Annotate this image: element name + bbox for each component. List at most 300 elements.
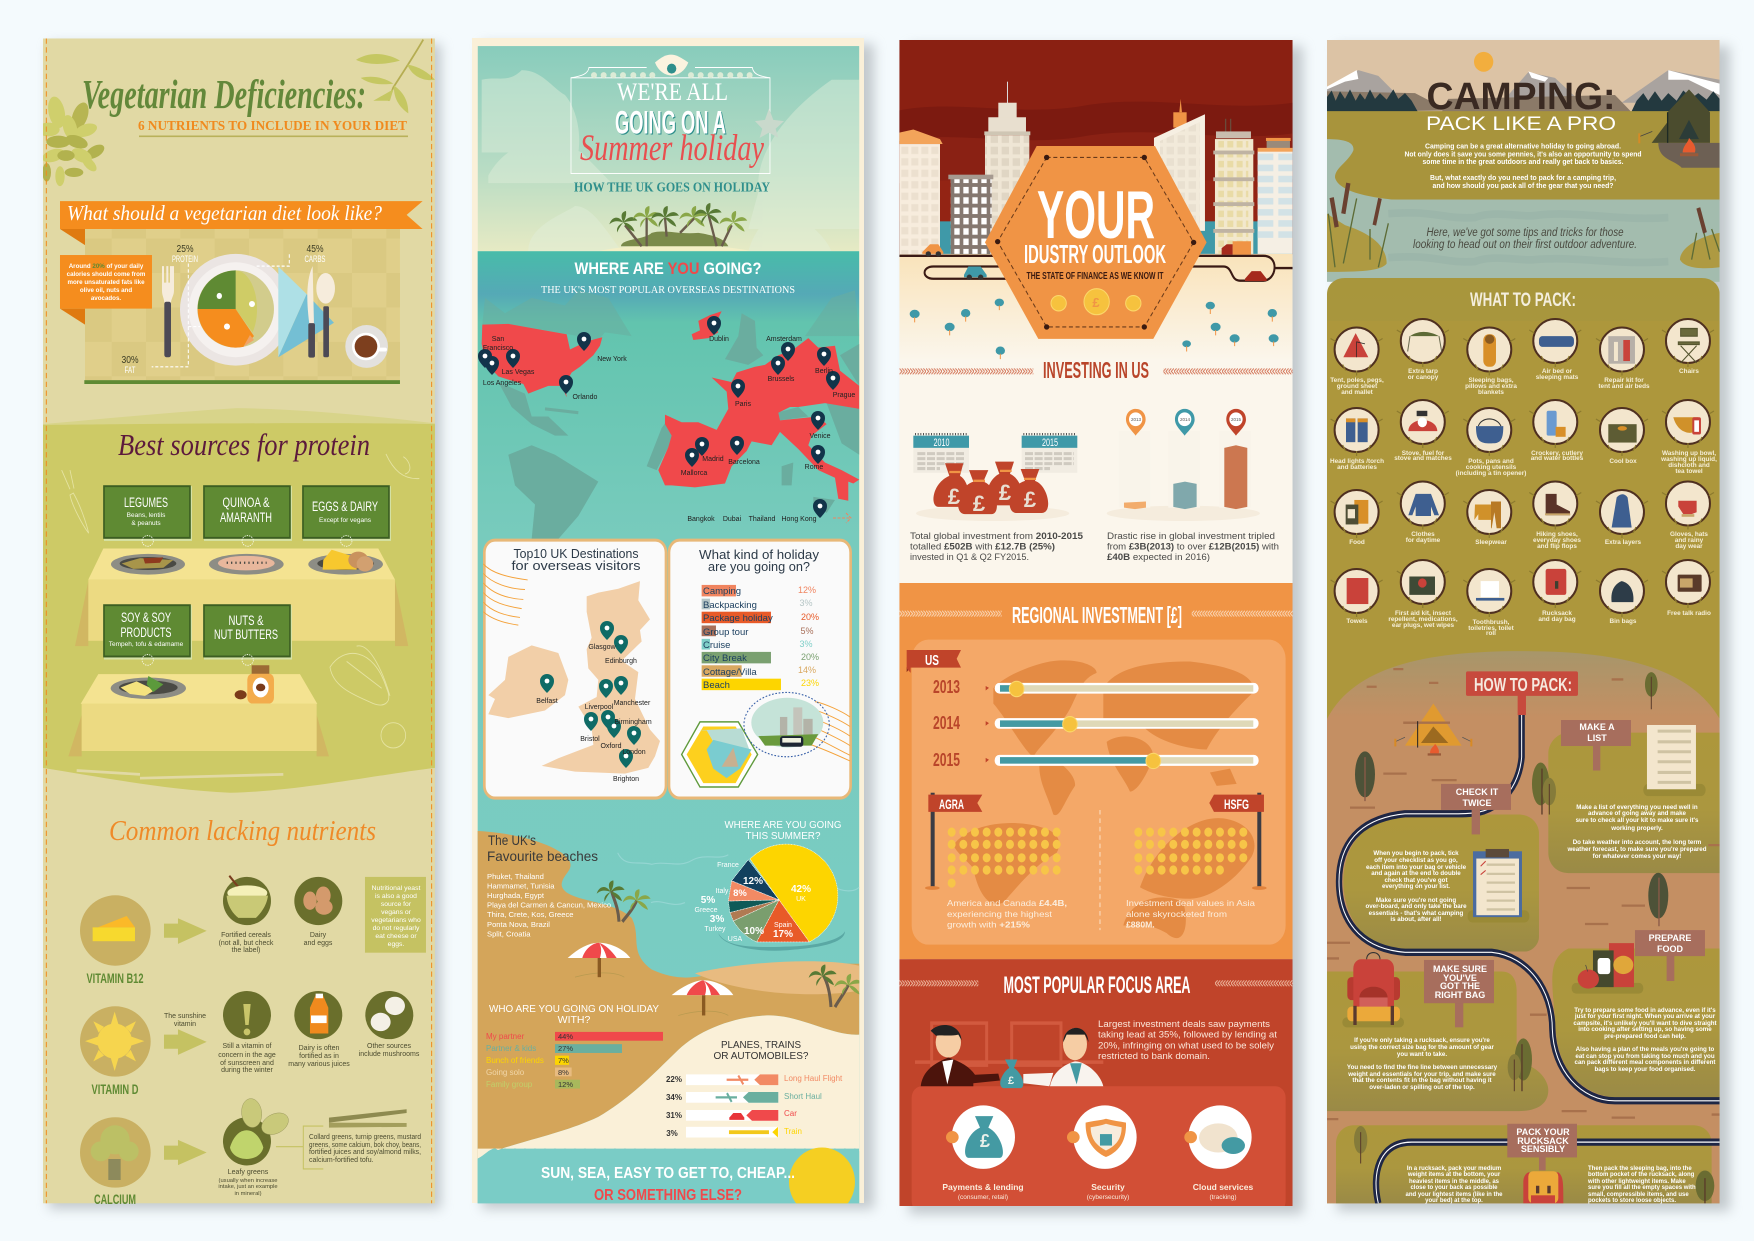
map city labels: Bangkok	[687, 516, 715, 523]
icon: star	[755, 108, 784, 138]
people	[921, 1025, 1103, 1088]
note text: is also a good	[375, 893, 417, 900]
transport title: OR AUTOMOBILES?	[714, 1050, 809, 1062]
focus labels: Payments & lending	[942, 1182, 1024, 1192]
frame	[571, 68, 770, 174]
nutrient text: fortified as in	[299, 1053, 339, 1060]
UK labels	[536, 644, 652, 783]
protein labels: NUT BUTTERS	[214, 627, 278, 642]
cards	[484, 540, 851, 798]
region text: experiencing the highest	[947, 909, 1053, 919]
icon: plate with pie	[152, 254, 291, 367]
section heading: THE UK'S MOST POPULAR OVERSEAS DESTINATIONS	[541, 285, 795, 296]
focus text	[1098, 1019, 1278, 1061]
icon: hexagon stamp	[682, 722, 758, 787]
map city labels: Thailand	[749, 516, 776, 523]
nutrients heading: Common lacking nutrients	[109, 815, 376, 847]
calcium text	[309, 1134, 421, 1164]
pie title: THIS SUMMER?	[746, 830, 821, 842]
money sign labels: £	[948, 484, 961, 509]
protein labels: & peanuts	[131, 520, 161, 527]
icon: broccoli	[91, 1125, 139, 1180]
item labels: and water bottles	[1531, 455, 1584, 462]
UK labels: Glasgow	[588, 644, 617, 651]
map city labels: Hong Kong	[781, 516, 817, 523]
investing text left: totalled £502B with £12.7B (25%)	[910, 542, 1055, 552]
who values: 27%	[558, 1044, 573, 1053]
icon: cheese	[93, 916, 135, 941]
icon: leafy greens	[230, 1097, 291, 1159]
transport values: 31%	[666, 1111, 682, 1120]
orange section	[899, 583, 1293, 959]
who values: 44%	[558, 1032, 573, 1041]
who bars	[555, 1032, 663, 1089]
focus icons	[946, 1105, 1252, 1169]
focus heading: MOST POPULAR FOCUS AREA	[1004, 972, 1190, 999]
item labels: Air bed or	[1542, 368, 1573, 375]
pie labels: Greece	[695, 907, 718, 914]
intro text: Not only does it save you some pennies, it's also an opportunity to spend	[1404, 150, 1642, 158]
holiday type labels: Package holiday	[703, 613, 773, 624]
green band	[43, 408, 435, 793]
item labels: stove and matches	[1394, 455, 1452, 462]
how-to text: rucksack right: sure you fill all the empty spaces with	[1588, 1185, 1696, 1191]
nutrient text: Other sources	[367, 1043, 411, 1050]
item labels: Sleeping bags,	[1468, 377, 1514, 384]
how-to text: list: sure to check all your kit to make sure it's	[1576, 817, 1699, 824]
callout text: more unsaturated fats like	[67, 279, 145, 286]
wooden signs	[1424, 720, 1705, 1170]
who labels: Partner & kids	[486, 1044, 536, 1053]
map city labels: Brussels	[768, 376, 795, 383]
how-to text: rucksack right: with other lightweight items. Make	[1587, 1179, 1686, 1185]
investing text left: Total global investment from 2010-2015	[910, 531, 1083, 541]
icons row three	[1346, 494, 1697, 528]
item labels: sleeping mats	[1536, 374, 1579, 381]
nutrient text: vitamin	[174, 1021, 196, 1028]
subtitle: 6 NUTRIENTS TO INCLUDE IN YOUR DIET	[138, 119, 408, 134]
pie labels: Italy	[716, 888, 729, 895]
footer text: OR SOMETHING ELSE?	[594, 1187, 742, 1204]
holiday type values: 12%	[798, 585, 816, 595]
ribbon	[60, 201, 423, 245]
region labels: 2015	[933, 750, 960, 770]
item labels: Rucksack	[1542, 610, 1572, 617]
how-to text: list: weather forecast, to make sure you're prepared	[1566, 846, 1707, 853]
UK pins	[540, 621, 641, 768]
focus text: restricted to bank domain.	[1098, 1051, 1210, 1061]
note text: vegans or	[381, 909, 412, 916]
regional heading: REGIONAL INVESTMENT [£]	[1012, 602, 1182, 628]
callout bracket	[276, 1126, 323, 1169]
calendar labels	[934, 437, 1058, 449]
hero heading: £	[1092, 295, 1100, 310]
item labels: Pots, pans and	[1468, 458, 1514, 465]
how-to text: bag: over-laden or spilling out of the top.	[1369, 1084, 1475, 1091]
how-to text: rucksack left: your bed) at the top.	[1425, 1198, 1483, 1204]
table one	[75, 549, 408, 646]
heading: GOING ON A	[616, 106, 727, 142]
how-to text: check: off your checklist as you go,	[1374, 857, 1458, 864]
region text: alone skyrocketed from	[1126, 909, 1227, 919]
item labels: and mallet	[1341, 389, 1374, 396]
holiday type values: 3%	[799, 598, 813, 608]
region labels: US	[925, 652, 939, 669]
how-to text: rucksack left: and your lightest items (like in the	[1405, 1192, 1503, 1198]
how-to text: food: eat can stop you from taking too much and you	[1575, 1053, 1715, 1060]
protein labels: Tempeh, tofu & edamame	[109, 641, 184, 648]
icon: list paper	[1643, 725, 1706, 796]
transport bars	[686, 1074, 778, 1138]
arrows	[164, 918, 207, 1165]
checker tablecloth	[84, 229, 400, 384]
transport labels: Short Haul	[784, 1092, 822, 1101]
main ground	[1327, 278, 1720, 1203]
tower	[984, 82, 1030, 231]
protein labels: NUTS &	[228, 613, 264, 628]
tree line	[1327, 89, 1720, 113]
fields	[1327, 733, 1720, 1203]
holiday type labels	[703, 586, 773, 691]
reed left	[1327, 183, 1388, 272]
how-to text: food: Try to prepare some food in advance, even if it's	[1574, 1007, 1716, 1014]
item labels: Cool box	[1609, 458, 1637, 465]
item labels: everyday shoes	[1533, 537, 1581, 544]
intro text: some time in the great outdoors and really get back to basics.	[1422, 157, 1624, 166]
focus text: taking lead at 35%, followed by lending at	[1098, 1030, 1278, 1040]
icon grid	[1331, 319, 1714, 617]
icon: mushrooms	[371, 997, 405, 1031]
map city labels: Madrid	[702, 456, 724, 463]
shadow ellipses	[916, 506, 1260, 521]
calcium text: fortified juices and soy/almond milks,	[309, 1149, 421, 1156]
sign labels: TWICE	[1462, 798, 1492, 808]
callout text: calories should come from	[67, 271, 146, 278]
how-to text: bag: that the contents fit in the bag without having it	[1352, 1077, 1492, 1084]
UK labels: London	[622, 749, 646, 756]
UK labels: Edinburgh	[605, 658, 637, 665]
transport values: 34%	[666, 1093, 682, 1102]
protein labels: SOY & SOY	[121, 610, 171, 625]
holiday type labels: Cruise	[703, 640, 730, 651]
how-to text: check: essentials - that's what camping	[1369, 910, 1464, 917]
icon: shell	[655, 55, 688, 75]
UK labels: Brighton	[613, 776, 639, 783]
holiday type values	[798, 585, 819, 688]
transport title: PLANES, TRAINS	[721, 1039, 801, 1051]
sign labels: LIST	[1587, 733, 1607, 743]
holiday type labels: Backpacking	[703, 600, 757, 611]
nutrient text: include mushrooms	[359, 1051, 420, 1058]
who labels: Family group	[486, 1080, 533, 1089]
pie labels: 8%	[733, 888, 747, 899]
protein heading: Best sources for protein	[118, 427, 370, 462]
item labels: day wear	[1675, 543, 1703, 550]
who title: WITH?	[558, 1014, 590, 1026]
sun	[1474, 52, 1493, 72]
icon: clipboard	[1468, 849, 1529, 922]
beaches list: Thira, Crete, Kos, Greece	[487, 910, 574, 919]
hexagon	[985, 146, 1207, 339]
how-to text: check: and again at the end to double	[1371, 870, 1461, 877]
item labels: roll	[1486, 630, 1496, 637]
focus labels: (tracking)	[1209, 1194, 1237, 1201]
money sign labels	[948, 480, 1037, 516]
pie title	[724, 819, 842, 842]
sky	[899, 40, 1293, 254]
bars 3D	[1119, 431, 1251, 509]
icon: knife and spoon	[307, 266, 335, 358]
icon: postmark	[744, 692, 829, 757]
chevrons red	[899, 980, 1293, 986]
clouds	[482, 70, 859, 251]
nutrient text: The sunshine	[164, 1013, 206, 1020]
icon: sun	[85, 1012, 144, 1071]
note text: Nutritional yeast	[372, 885, 420, 892]
protein labels: Beans, lentils	[127, 512, 166, 519]
callout text: olive oil, nuts and	[80, 287, 132, 294]
heading: Summer holiday	[580, 128, 764, 169]
focus text: 20%, infringing on what used to be solely	[1098, 1040, 1275, 1050]
item labels: toiletries, toilet	[1468, 625, 1515, 632]
pie ripple	[718, 931, 845, 951]
money sign labels: £	[999, 480, 1012, 505]
world map	[953, 660, 1254, 938]
sign labels: SENSIBLY	[1521, 1144, 1565, 1154]
map city labels: Las Vegas	[502, 369, 535, 376]
transport labels: Train	[784, 1127, 802, 1136]
who values	[558, 1032, 573, 1089]
how-to text: check: check that you've got	[1384, 877, 1448, 884]
item labels: Tent, poles, pegs,	[1330, 377, 1384, 384]
beaches heading: The UK's	[488, 832, 536, 848]
red Ireland	[692, 311, 722, 340]
money sign labels: £	[1024, 487, 1037, 512]
item labels: Washing up bowl,	[1662, 450, 1716, 457]
holiday type labels: Group tour	[703, 627, 748, 638]
nutrient text: in mineral)	[234, 1191, 262, 1197]
lake text: looking to head out on their first outdoor adventure.	[1413, 239, 1637, 251]
item labels: Food	[1349, 539, 1365, 546]
cream shore	[477, 1015, 859, 1159]
item labels: Bin bags	[1610, 618, 1637, 625]
transport values	[666, 1075, 682, 1138]
subtitle: PACK LIKE A PRO	[1426, 114, 1616, 135]
map city labels: New York	[597, 356, 627, 363]
item labels: and batteries	[1337, 464, 1377, 471]
transport values: 22%	[666, 1075, 682, 1084]
plate labels: 45%	[306, 244, 324, 255]
region text: America and Canada £4.4B,	[947, 898, 1067, 908]
note text: eat cheese or	[375, 933, 417, 940]
icon: palm trees	[597, 880, 862, 1007]
reed right	[1680, 208, 1720, 268]
pins	[1126, 409, 1246, 436]
calcium text: greens, some calcium, bok choy, beans,	[309, 1142, 421, 1149]
transport title	[714, 1039, 809, 1062]
icon: leaves left	[43, 96, 104, 186]
plate labels: FAT	[124, 365, 136, 375]
callout fold	[60, 255, 152, 325]
card titles: Top10 UK Destinations	[514, 546, 639, 561]
pin labels: 2015	[1231, 417, 1242, 422]
doodles	[62, 454, 419, 748]
how-to text: list: working properly.	[1610, 825, 1663, 832]
sky	[1327, 40, 1720, 116]
beaches list: Hammamet, Tunisia	[487, 882, 555, 890]
icon: coffee cup	[345, 325, 388, 368]
how-to text: rucksack right: small, compressible items, and use	[1588, 1192, 1689, 1198]
how-to text: rucksack left: weight items at the bottom, your	[1407, 1172, 1501, 1178]
pie chart	[728, 844, 838, 942]
how-to text: food	[1573, 1007, 1717, 1073]
pie labels: 17%	[773, 929, 793, 940]
UK labels: Oxford	[600, 743, 622, 750]
arrow: more destinations	[833, 513, 851, 523]
item labels: tent and air beds	[1598, 383, 1650, 390]
footer wave	[477, 1148, 859, 1203]
money bags	[933, 462, 1048, 514]
icon: tent	[1638, 89, 1710, 145]
item labels: ear plugs, wet wipes	[1392, 622, 1455, 629]
nutrient text: and eggs	[304, 940, 333, 947]
beaches list: Hurghada, Egypt	[487, 891, 545, 900]
how-to text: bag: You need to find the fine line between unnecessary	[1347, 1064, 1498, 1071]
hero heading	[1024, 177, 1166, 310]
who values: 7%	[558, 1056, 569, 1065]
chevrons regional	[899, 611, 1293, 617]
red section	[899, 959, 1293, 1208]
item labels: (including a tin opener)	[1456, 470, 1526, 477]
how-to text: rucksack right: pockets to store loose objects.	[1588, 1198, 1676, 1204]
callout text: avocados.	[91, 295, 121, 302]
map of UK	[488, 581, 660, 774]
region labels	[925, 652, 1249, 812]
icon labels: pound signs: £	[980, 1131, 990, 1151]
sign labels: RIGHT BAG	[1435, 990, 1485, 1000]
plate labels: PROTEIN	[172, 254, 198, 264]
map city labels: Berlin	[815, 368, 833, 375]
beaches heading	[487, 832, 598, 864]
sign labels	[1433, 722, 1691, 1154]
coin grids	[952, 832, 1247, 883]
heading: GOING ON A	[615, 104, 726, 140]
beaches list: Phuket, Thailand	[487, 872, 544, 881]
trees	[1354, 672, 1714, 1203]
transport labels	[784, 1074, 843, 1136]
item labels: washing up liquid,	[1660, 456, 1717, 463]
card titles	[512, 546, 819, 574]
pie title: WHERE ARE YOU GOING	[724, 819, 842, 831]
pin labels: 2013	[1131, 417, 1142, 422]
gray building	[948, 175, 993, 254]
investing text left: invested in Q1 & Q2 FY2015.	[910, 552, 1029, 562]
sign labels: MAKE SURE	[1433, 964, 1487, 974]
how-to text: check: everything on your list.	[1382, 883, 1450, 890]
icon: campfire	[1658, 138, 1720, 168]
heading: HOW THE UK GOES ON HOLIDAY	[574, 180, 770, 196]
how-to text: food: pre-prepared food can help.	[1604, 1033, 1686, 1040]
focus labels	[942, 1182, 1254, 1201]
who title: WHO ARE YOU GOING ON HOLIDAY	[489, 1003, 659, 1015]
how-to text: bag	[1347, 1037, 1498, 1091]
nutrient text: Still a vitamin of	[222, 1043, 272, 1050]
sign labels: GOT THE	[1440, 981, 1480, 991]
how-to text: bag: If you're only taking a rucksack, ensure you're	[1354, 1037, 1490, 1044]
how-to text: check: each item into your bag or vehicle	[1366, 864, 1467, 871]
inner red panel	[912, 1086, 1286, 1213]
road main	[1339, 715, 1720, 1101]
plate labels	[122, 244, 326, 375]
plate labels: 25%	[176, 244, 194, 255]
building	[899, 130, 943, 254]
windows tower	[1213, 119, 1254, 254]
how to pack heading: HOW TO PACK:	[1474, 675, 1572, 695]
nutrient text	[164, 932, 420, 1197]
focus labels: (cybersecurity)	[1087, 1194, 1129, 1201]
coins	[1051, 289, 1141, 315]
card titles: are you going on?	[708, 559, 810, 574]
red Europe	[658, 338, 859, 501]
how-to text: rucksack left	[1405, 1166, 1503, 1204]
item labels: Hiking shoes,	[1536, 531, 1578, 538]
icon: napkin	[278, 267, 334, 357]
item labels	[1330, 368, 1717, 637]
holiday type values: 23%	[801, 678, 819, 688]
nutrient text: Fortified cereals	[221, 932, 271, 939]
note box	[365, 877, 426, 953]
vitamin labels	[86, 970, 144, 1207]
icons row one	[1343, 329, 1699, 367]
UK labels: Belfast	[536, 698, 558, 705]
how-to text: rucksack right: Then pack the sleeping bag, into the	[1588, 1166, 1692, 1172]
calcium text: Collard greens, turnip greens, mustard	[309, 1134, 421, 1141]
holiday type bars	[702, 585, 781, 690]
holiday type values: 14%	[798, 665, 816, 675]
terrain marks	[1327, 669, 1720, 1119]
UK labels: Manchester	[614, 700, 651, 707]
card titles: for overseas visitors	[512, 558, 641, 573]
protein labels: Except for vegans	[319, 517, 372, 524]
callout text	[67, 263, 146, 302]
pin labels	[1131, 417, 1242, 422]
transport labels: Long Haul Flight	[784, 1074, 843, 1083]
chevrons	[899, 368, 1293, 374]
UK labels: Liverpool	[585, 704, 614, 711]
beaches heading: Favourite beaches	[487, 848, 598, 864]
signs row two	[104, 605, 292, 665]
footer text	[541, 1165, 795, 1204]
UK labels: Birmingham	[614, 719, 652, 726]
sea ripples	[618, 853, 859, 904]
icon: food and apple	[1572, 943, 1643, 994]
beaches list: Split, Croatia	[487, 930, 531, 938]
plate with tofu and jar	[111, 665, 274, 704]
inner panel	[912, 640, 1286, 945]
holiday type values: 20%	[801, 612, 819, 622]
section heading	[541, 259, 795, 296]
map city labels: Los Angeles	[483, 380, 522, 387]
flags	[925, 793, 1267, 890]
pie labels: 42%	[791, 884, 811, 895]
map city labels: Venice	[809, 433, 831, 440]
icons row two	[1346, 411, 1701, 443]
note text: do not regularly	[373, 925, 420, 932]
item labels: Gloves, hats	[1670, 531, 1708, 538]
icon: umbrella two	[672, 980, 733, 1015]
right building	[1258, 138, 1293, 254]
protein labels: QUINOA &	[222, 495, 270, 510]
